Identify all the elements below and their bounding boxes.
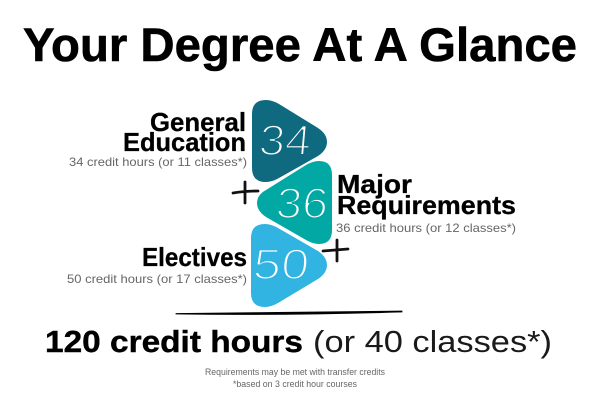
icon: 50 triangle: 50 — [251, 241, 311, 289]
icon: 50 triangle — [251, 224, 327, 307]
icon: plus right — [323, 240, 348, 261]
icon: 34 triangle — [252, 100, 327, 182]
heading: general education — [123, 107, 246, 157]
footnote: Requirements may be met with transfer credits — [205, 367, 385, 377]
text: electives credit hours: 50 credit hours (or 17 classes*) — [67, 272, 247, 286]
total text: 120 credit hours — [45, 324, 303, 359]
icon: plus left — [233, 182, 258, 203]
heading: electives: Electives — [142, 242, 247, 272]
total text — [45, 324, 552, 359]
icon: 36 triangle: 36 — [274, 180, 330, 228]
footnote — [205, 367, 385, 389]
total text: (or 40 classes*) — [313, 324, 552, 359]
panel: electives — [67, 224, 327, 307]
heading: major requirements — [337, 169, 516, 220]
footnote: *based on 3 credit hour courses — [233, 379, 357, 389]
heading: general education: Education — [123, 127, 246, 157]
heading: major requirements: Requirements — [337, 190, 516, 220]
icon: 34 triangle: 34 — [257, 117, 313, 165]
panel: major requirements — [257, 161, 516, 244]
sum line — [176, 311, 402, 314]
heading: general education: General — [150, 107, 246, 137]
icon: 36 triangle — [257, 161, 332, 244]
text: general education credit hours: 34 credit hours (or 11 classes*) — [69, 155, 247, 169]
heading: major requirements: Major — [337, 169, 412, 199]
panel: general education — [69, 100, 327, 182]
text: major requirements credit hours: 36 credit hours (or 12 classes*) — [336, 221, 516, 235]
title: Your Degree At A Glance — [23, 18, 577, 71]
